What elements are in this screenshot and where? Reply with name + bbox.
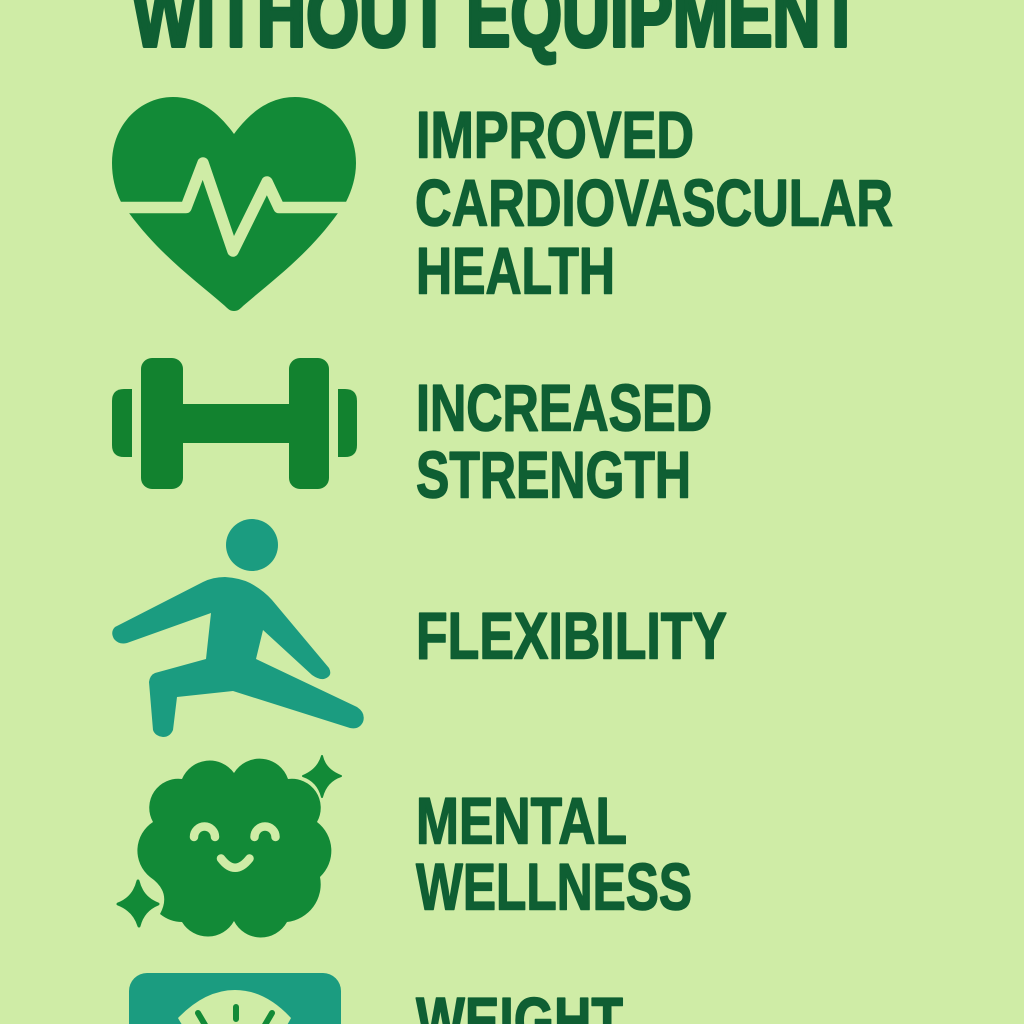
text: increased strength — [416, 370, 712, 512]
text: mental wellness — [416, 784, 692, 924]
text: improved cardiovascular health: HEALTH — [416, 234, 615, 308]
title — [132, 0, 861, 66]
icon: smiling brain with sparkles — [118, 756, 341, 937]
icon: stretching person — [112, 519, 364, 737]
icon: weighing scale — [129, 973, 341, 1024]
text: mental wellness: WELLNESS — [416, 850, 692, 924]
text: improved cardiovascular health: CARDIOVASCULAR — [415, 166, 893, 240]
text: improved cardiovascular health — [415, 98, 893, 308]
text: flexibility: FLEXIBILITY — [416, 598, 727, 672]
icon: heart with pulse — [100, 97, 370, 311]
text: improved cardiovascular health: IMPROVED — [416, 98, 694, 172]
text: mental wellness: MENTAL — [416, 784, 627, 858]
icon: dumbbell — [112, 358, 357, 489]
text: increased strength: INCREASED — [416, 370, 712, 444]
text: increased strength: STRENGTH — [416, 438, 691, 512]
